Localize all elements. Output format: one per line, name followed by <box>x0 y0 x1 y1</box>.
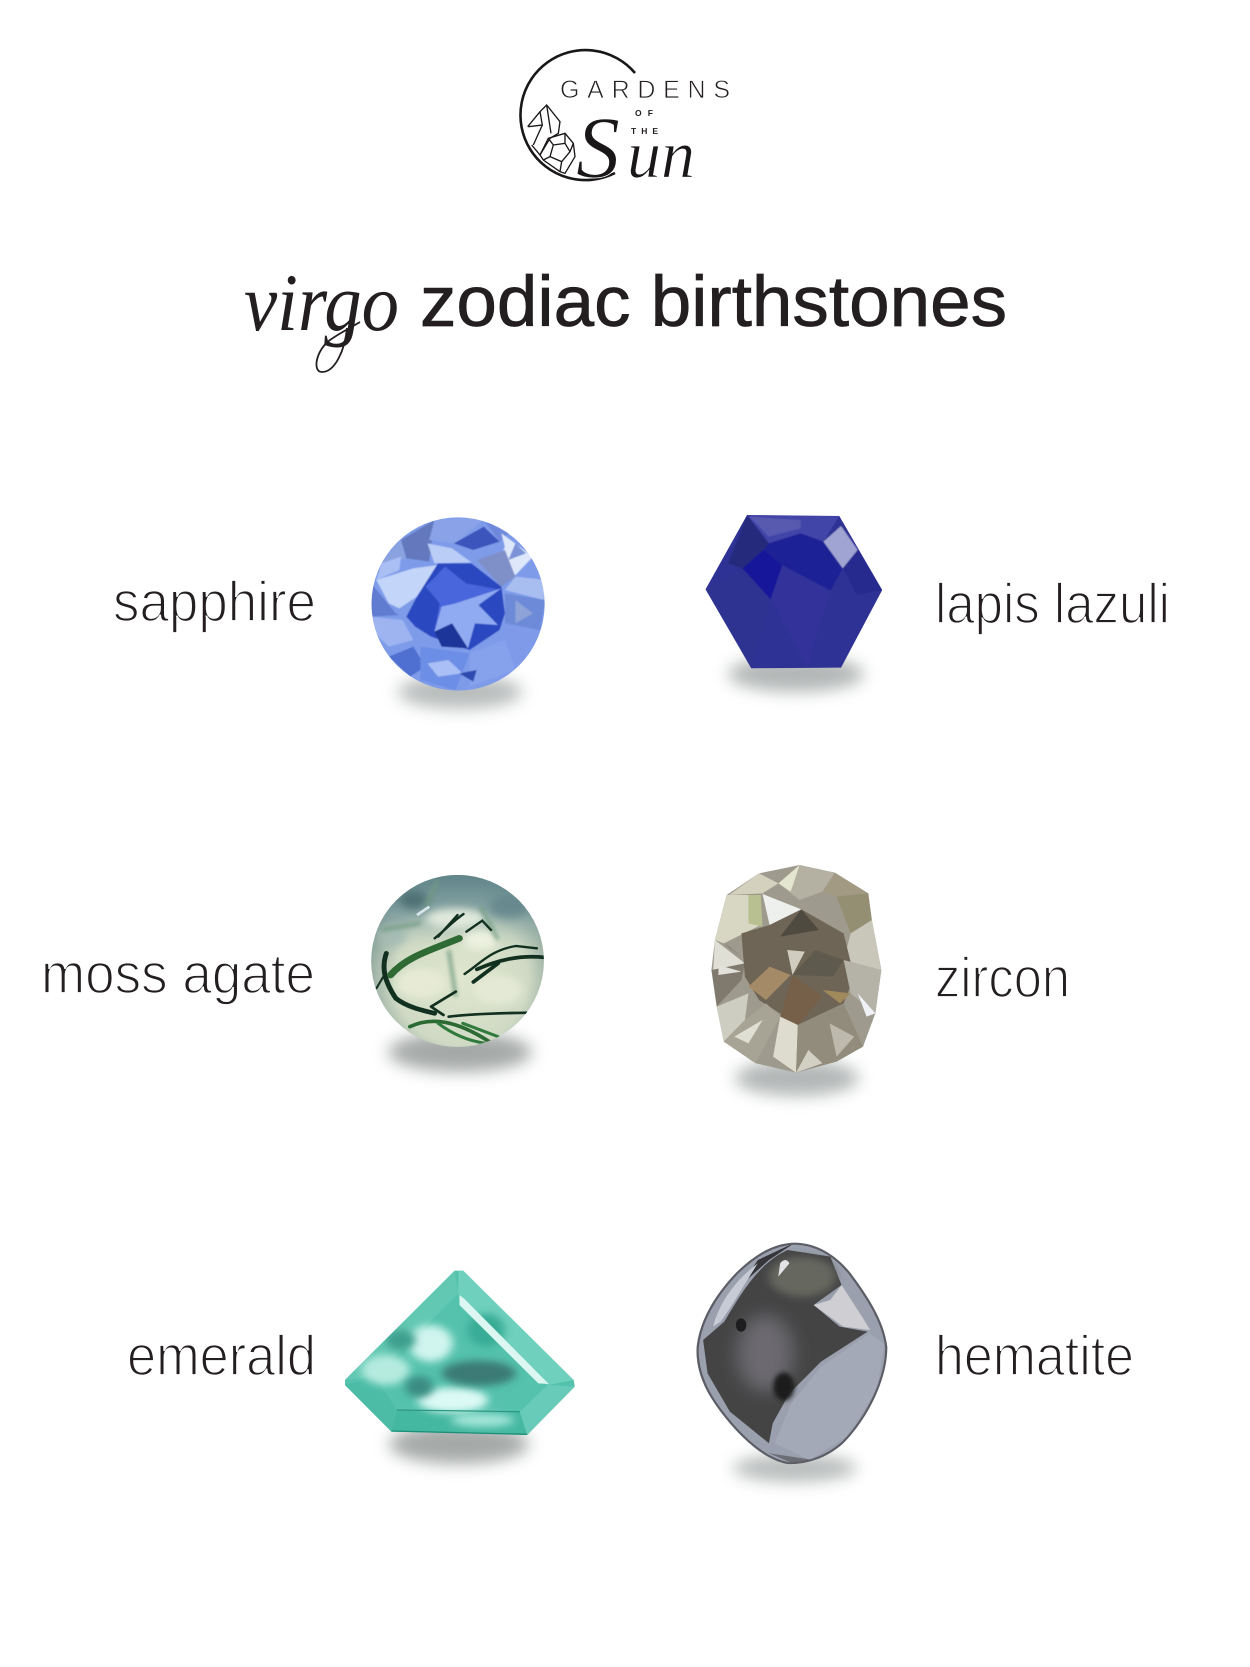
panel: hematite <box>695 1240 1134 1482</box>
gem: hematite <box>695 1240 890 1467</box>
logo: Gardens of the Sun <box>520 50 730 197</box>
gem: sapphire <box>372 517 545 691</box>
logo icon: crystals <box>528 105 575 173</box>
logo wordmark: GARDENS: GARDENS <box>560 76 730 104</box>
logo wordmark: OF: OF <box>635 108 653 118</box>
panel: emerald <box>127 1267 579 1464</box>
gem shadow: hematite <box>733 1454 857 1482</box>
panel: moss agate <box>41 873 547 1072</box>
label: moss agate: moss agate <box>41 942 315 1006</box>
gem shadow: zircon <box>735 1060 859 1096</box>
logo wordmark: Sun: un <box>627 116 695 192</box>
logo ring <box>520 50 635 180</box>
gem: zircon <box>710 863 882 1073</box>
title script word: virgo: virgo <box>244 257 399 348</box>
gem shadow: emerald <box>389 1424 529 1464</box>
gem: lapis lazuli <box>702 513 885 670</box>
label: sapphire: sapphire <box>113 570 316 634</box>
gem shadow: sapphire <box>398 675 522 709</box>
gem shadow: lapis lazuli <box>728 656 864 692</box>
title words: zodiac birthstones: zodiac birthstones <box>420 263 1007 342</box>
label: hematite: hematite <box>935 1324 1134 1388</box>
title <box>244 257 1007 372</box>
gem: emerald <box>341 1267 579 1440</box>
gem shadow: moss agate <box>388 1032 532 1072</box>
gem: moss agate <box>368 873 547 1050</box>
logo wordmark: THE: THE <box>631 126 658 136</box>
logo wordmark: Sun: S <box>576 100 620 197</box>
panel: sapphire <box>113 510 554 709</box>
label: emerald: emerald <box>127 1324 316 1388</box>
panel: lapis lazuli <box>702 513 1170 692</box>
label: zircon: zircon <box>935 946 1070 1010</box>
panel: zircon <box>710 863 1070 1096</box>
label: lapis lazuli: lapis lazuli <box>935 572 1170 636</box>
